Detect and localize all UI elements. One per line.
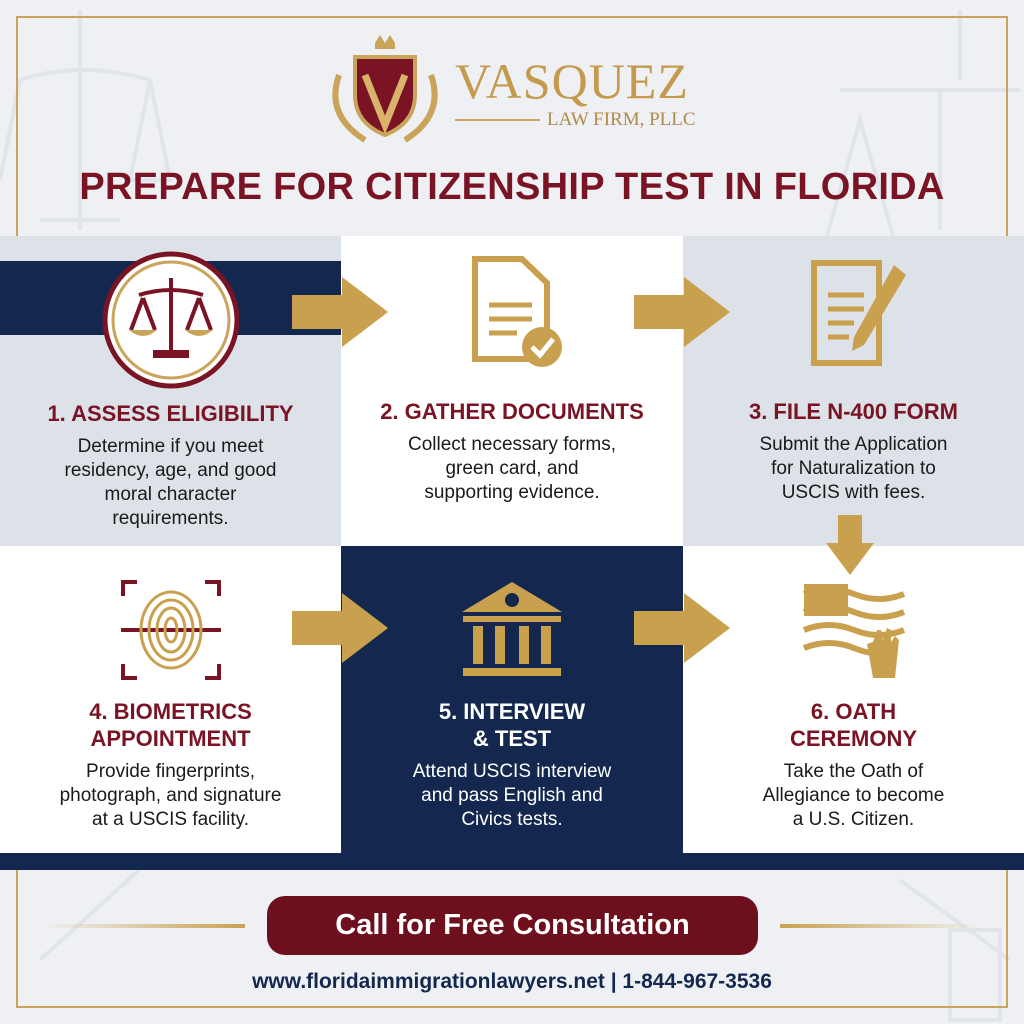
panel: step 3: for Naturalization to [771,458,936,479]
wordmark: VASQUEZ [455,53,689,109]
icon: document check [472,256,562,367]
icon: form pen [811,260,906,366]
icon: flag hand [802,584,906,678]
panel: step 1: residency, age, and good [65,460,276,481]
panel: step 5: Attend USCIS interview [413,761,611,782]
panel: step 4: 4. BIOMETRICS [89,699,252,724]
panel: step 4: at a USCIS facility. [92,809,249,830]
contact line: www.floridaimmigrationlawyers.net | 1-844-967-3536 [252,970,772,993]
panel: step 4: APPOINTMENT [90,726,251,751]
panel: step 2: 2. GATHER DOCUMENTS [380,399,644,424]
gold lines [45,924,245,928]
panel: step 3: 3. FILE N-400 FORM [749,399,958,424]
icon: courthouse [462,582,562,676]
panel: step 5: & TEST [473,726,551,751]
panel: step 1: 1. ASSESS ELIGIBILITY [47,401,294,426]
button: call: Call for Free Consultation [335,909,690,941]
panel: step 5: 5. INTERVIEW [439,699,585,724]
grid backgrounds [0,236,341,546]
panel: step 6: Take the Oath of [784,761,923,782]
panel: step 1: requirements. [112,508,229,529]
panel: step 1 [47,252,294,529]
panel: step 5: and pass English and [421,785,603,806]
panel: step 3: Submit the Application [759,434,948,455]
logo [332,35,696,142]
title: PREPARE FOR CITIZENSHIP TEST IN FLORIDA [79,166,945,208]
arrow 1 [292,277,388,347]
panel: step 1: moral character [104,484,236,505]
panel: step 3 [749,260,958,503]
panel: step 2: Collect necessary forms, [408,434,616,455]
panel: step 4 [60,580,281,830]
arrow down [826,515,874,575]
panel: step 4: Provide fingerprints, [86,761,255,782]
panel: step 6: CEREMONY [790,726,917,751]
panel: step 2: green card, and [445,458,579,479]
panel: step 2: supporting evidence. [424,482,600,503]
panel: step 3: USCIS with fees. [782,482,925,503]
icon: fingerprint [121,580,221,680]
panel: step 2 [380,256,644,503]
arrow 4 [292,593,388,663]
panel: step 4: photograph, and signature [60,785,281,806]
panel: step 5: Civics tests. [461,809,563,830]
panel: step 6: a U.S. Citizen. [793,809,914,830]
logo: LAW FIRM, PLLC [547,109,696,130]
panel: step 5 [412,582,612,830]
button: call [267,896,758,955]
icon: crest [332,35,438,142]
icon: scales [102,252,240,388]
panel: step 1: Determine if you meet [78,436,263,457]
panel: step 6 [762,584,944,830]
arrow 5 [634,593,730,663]
panel: step 6: Allegiance to become [763,785,944,806]
panel: step 6: 6. OATH [811,699,896,724]
arrow 2 [634,277,730,347]
